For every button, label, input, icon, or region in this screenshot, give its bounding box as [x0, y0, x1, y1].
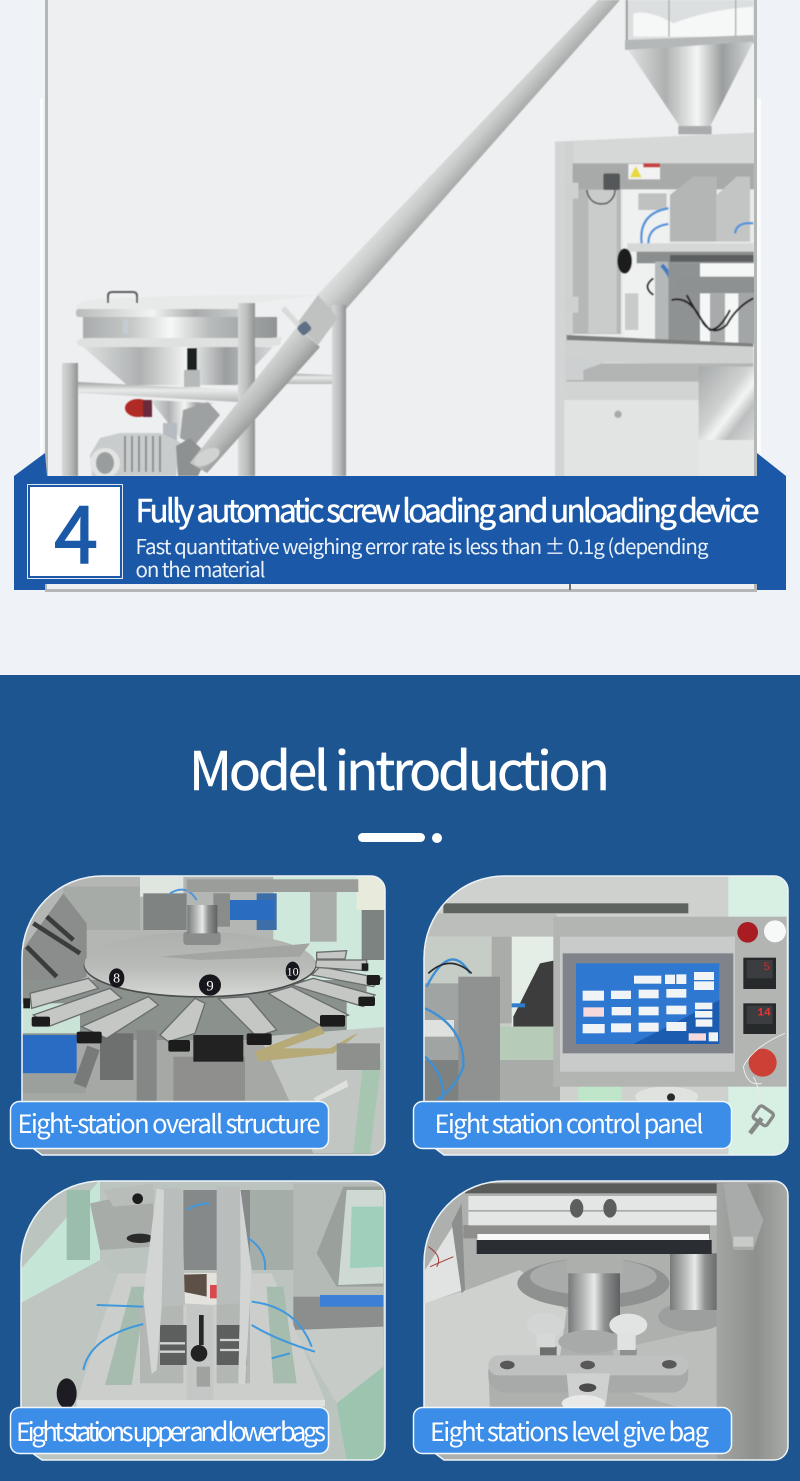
frame bottom edge	[45, 580, 757, 592]
panel: eight stations upper and lower bags	[10, 1180, 387, 1463]
panel: eight stations level give bag	[414, 1180, 790, 1463]
label: Eight station control panel	[414, 1102, 732, 1148]
banner description: Fast quantitative weighing error rate is less than ± 0.1g (depending	[136, 530, 709, 560]
station number 9: 9	[206, 978, 214, 994]
heading decoration: pill and dot	[358, 833, 442, 843]
station number 9	[199, 974, 221, 996]
illustration: filling hopper and pouch machine	[555, 0, 755, 477]
station number 10: 10	[287, 965, 299, 979]
banner title: Fully automatic screw loading and unloading device	[136, 486, 759, 532]
panel: screw loading machine image	[40, 0, 761, 592]
arms	[30, 951, 382, 1042]
station number 8: 8	[113, 972, 120, 987]
temperature controller bottom: 14	[757, 1007, 771, 1019]
number box: 4	[54, 471, 98, 586]
label: Eight station control panel: Eight station control panel	[434, 1104, 704, 1141]
label: Eight stations upper and lower bags: Eight stations upper and lower bags	[16, 1412, 326, 1449]
heading: Model introduction: Model introduction	[189, 730, 610, 806]
panel: eight-station overall structure	[10, 875, 387, 1157]
illustration: screw conveyor and hopper	[62, 0, 620, 478]
temperature controller top: 5	[763, 962, 770, 974]
banner: feature 4	[14, 453, 786, 590]
station number 10	[286, 962, 300, 980]
label: Eight-station overall structure: Eight-station overall structure	[18, 1104, 320, 1141]
number box	[28, 471, 122, 586]
banner description: on the material	[136, 553, 266, 583]
temperature controller top	[743, 958, 776, 989]
banner description	[136, 530, 709, 583]
label: Eight stations level give bag: Eight stations level give bag	[430, 1412, 710, 1449]
station number 8	[109, 968, 124, 988]
temperature controller bottom	[743, 1003, 776, 1034]
panel: eight station control panel	[414, 875, 790, 1155]
